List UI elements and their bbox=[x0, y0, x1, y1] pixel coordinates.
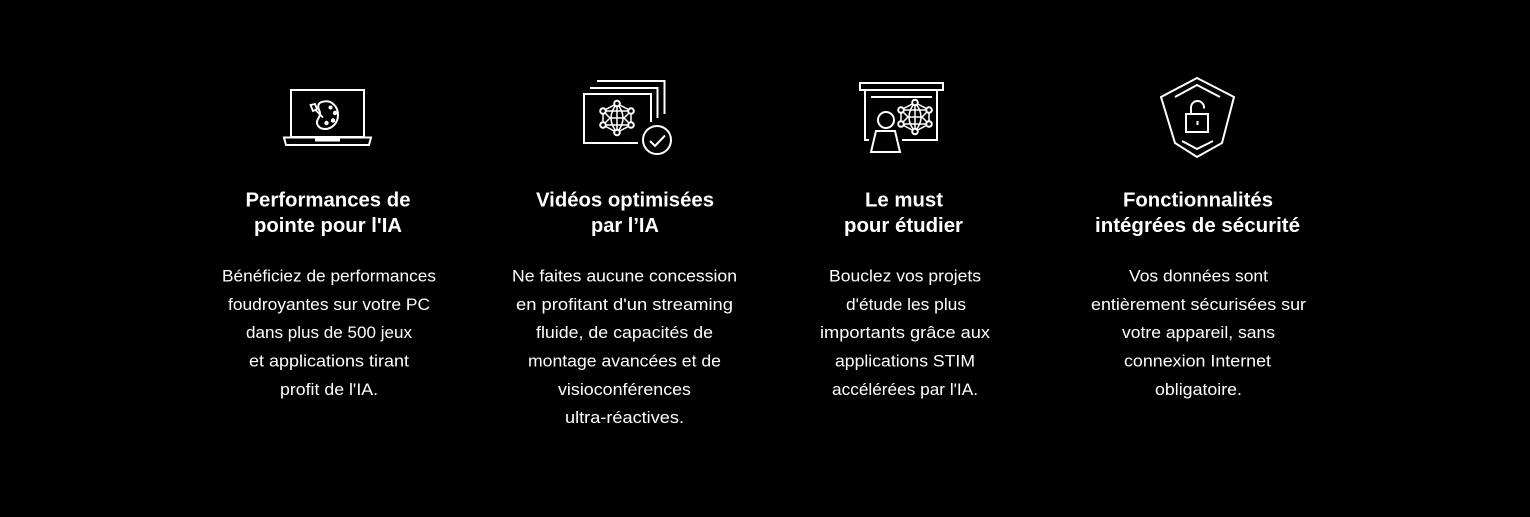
heading: fonctionnalités intégrées de sécurité: intégrées de sécurité bbox=[1095, 215, 1300, 237]
icon: shield with open padlock bbox=[1161, 78, 1234, 157]
text block: étudier description: accélérées par l'IA. bbox=[832, 380, 978, 399]
heading: le must pour étudier: Le must bbox=[865, 190, 943, 212]
text block: sécurité description: connexion Internet bbox=[1124, 352, 1271, 370]
text block: performances description: dans plus de 500 jeux bbox=[246, 323, 413, 342]
panel: fonctionnalités de sécurité bbox=[1091, 78, 1307, 399]
text block: étudier description bbox=[820, 266, 991, 399]
panel: vidéos optimisées bbox=[512, 81, 737, 427]
text block: performances description bbox=[222, 266, 436, 399]
icon: stacked video frames with network and check bbox=[584, 81, 671, 154]
text block: sécurité description: obligatoire. bbox=[1155, 380, 1242, 399]
text block: performances description: foudroyantes sur votre PC bbox=[228, 295, 430, 314]
text block: performances description: profit de l'IA. bbox=[280, 380, 378, 399]
heading: performances de pointe pour l'IA: Performances de bbox=[246, 190, 410, 212]
heading: performances de pointe pour l'IA: pointe pour l'IA bbox=[254, 215, 402, 237]
heading: performances de pointe pour l'IA bbox=[246, 190, 410, 237]
text block: étudier description: d'étude les plus bbox=[846, 295, 966, 314]
text block: sécurité description: Vos données sont bbox=[1129, 266, 1268, 286]
text block: vidéos description: Ne faites aucune concession bbox=[512, 266, 737, 286]
text block: étudier description: Bouclez vos projets bbox=[829, 266, 981, 286]
heading: fonctionnalités intégrées de sécurité: Fonctionnalités bbox=[1123, 190, 1273, 212]
heading: vidéos optimisées par l'IA bbox=[536, 190, 714, 237]
text block: vidéos description bbox=[512, 266, 737, 427]
text block: sécurité description bbox=[1091, 266, 1307, 399]
text block: sécurité description: entièrement sécurisées sur bbox=[1091, 295, 1307, 314]
text block: vidéos description: visioconférences bbox=[558, 380, 691, 399]
text block: sécurité description: votre appareil, sans bbox=[1122, 323, 1275, 342]
heading: fonctionnalités intégrées de sécurité bbox=[1095, 190, 1300, 237]
text block: étudier description: applications STIM bbox=[835, 352, 975, 370]
icon: presenter at projection screen bbox=[860, 83, 943, 152]
text block: vidéos description: ultra-réactives. bbox=[565, 408, 684, 427]
text block: étudier description: importants grâce aux bbox=[820, 323, 991, 342]
panel: le must pour étudier bbox=[820, 83, 991, 399]
text block: vidéos description: fluide, de capacités de bbox=[536, 323, 713, 342]
text block: performances description: Bénéficiez de performances bbox=[222, 266, 436, 286]
text block: vidéos description: en profitant d'un streaming bbox=[516, 295, 733, 314]
heading: le must pour étudier: pour étudier bbox=[844, 215, 963, 237]
panel: performances de pointe bbox=[222, 90, 436, 399]
heading: vidéos optimisées par l'IA: Vidéos optimisées bbox=[536, 190, 714, 212]
text block: vidéos description: montage avancées et de bbox=[528, 352, 721, 370]
heading: le must pour étudier bbox=[844, 190, 963, 237]
icon: laptop with palette bbox=[284, 90, 371, 145]
heading: vidéos optimisées par l'IA: par l’IA bbox=[591, 215, 659, 237]
text block: performances description: et applications tirant bbox=[249, 352, 409, 370]
